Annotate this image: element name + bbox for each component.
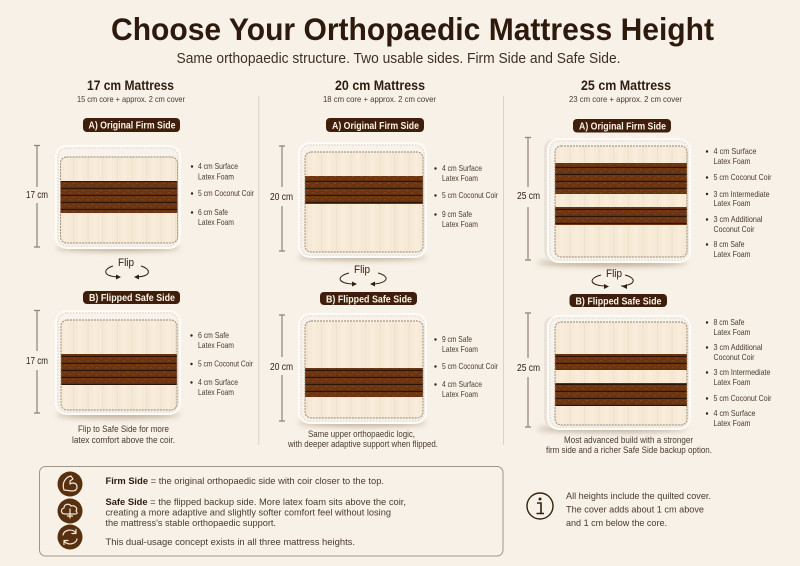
caption: 25 cm (546, 435, 712, 455)
layer list: 25 cm firm: Coconut Coir (714, 224, 755, 234)
label pill: safe side: B) Flipped Safe Side (89, 293, 175, 304)
flip arrows: 20 cm (340, 264, 386, 286)
layer list: 25 cm firm: 5 cm Coconut Coir (714, 172, 772, 182)
text: dual usage: This dual-usage concept exists in all three mattress heights. (106, 536, 355, 547)
layer list: 17 cm safe: 4 cm Surface (198, 377, 238, 387)
note: cover (566, 490, 711, 528)
note: cover: The cover adds about 1 cm above (566, 504, 704, 514)
panel: 20 cm mattress (270, 77, 498, 449)
layer list: 20 cm firm: 4 cm Surface (442, 163, 482, 173)
heading: 20 cm: 20 cm Mattress (335, 77, 425, 93)
flip arrows: 25 cm: Flip (606, 268, 622, 280)
height bracket: 20 cm firm: 20 cm (270, 192, 293, 203)
layer list: 25 cm firm: 3 cm Additional (714, 214, 763, 224)
layer list: 20 cm safe: 9 cm Safe (442, 334, 472, 344)
layer list: 25 cm safe: 3 cm Intermediate (714, 367, 771, 377)
layer list: 25 cm safe: 8 cm Safe (714, 317, 745, 327)
layer list: 25 cm firm: Latex Foam (714, 198, 751, 208)
panel: 25 cm mattress (517, 77, 772, 455)
layer list: 17 cm safe (190, 330, 253, 397)
mattress: 20 cm safe side (298, 314, 426, 426)
layer list: 20 cm firm (434, 163, 498, 229)
mattress: 17 cm safe side (56, 311, 180, 418)
layer list: 25 cm safe: Coconut Coir (714, 352, 755, 362)
layer list: 25 cm firm: 8 cm Safe (714, 239, 745, 249)
height bracket: 20 cm safe: 20 cm (270, 362, 293, 373)
layer list: 20 cm safe: 4 cm Surface (442, 379, 482, 389)
mattress: 25 cm firm side (537, 139, 690, 266)
caption: 20 cm (287, 429, 438, 449)
subheading: 20 cm: 18 cm core + approx. 2 cm cover (323, 94, 436, 104)
text: safe side: the mattress's stable orthopaedic support. (106, 517, 276, 528)
caption: 17 cm: latex comfort above the coir. (72, 435, 175, 445)
layer list: 17 cm firm: Latex Foam (198, 217, 234, 227)
caption: 20 cm: Same upper orthopaedic logic, (308, 429, 415, 439)
panel: 17 cm mattress (26, 77, 254, 445)
layer list: 17 cm safe: Latex Foam (198, 387, 234, 397)
layer list: 20 cm safe: 5 cm Coconut Coir (442, 361, 498, 371)
layer list: 25 cm safe: 4 cm Surface (714, 408, 756, 418)
height bracket: 17 cm firm (26, 146, 48, 247)
layer list: 20 cm firm: Latex Foam (442, 219, 478, 229)
layer list: 17 cm firm (191, 161, 254, 227)
layer list: 25 cm safe: Latex Foam (714, 377, 751, 387)
layer list: 20 cm firm: 5 cm Coconut Coir (442, 190, 498, 200)
layer list: 17 cm firm: 5 cm Coconut Coir (198, 188, 254, 198)
caption: 17 cm: Flip to Safe Side for more (78, 424, 169, 434)
height bracket: 17 cm firm: 17 cm (26, 190, 48, 201)
caption: 25 cm: Most advanced build with a stronger (564, 435, 693, 445)
label pill: firm side (326, 118, 424, 132)
layer list: 25 cm firm: 3 cm Intermediate (714, 189, 770, 199)
note: cover: All heights include the quilted cover. (566, 490, 711, 501)
text: safe side (106, 496, 406, 528)
height bracket: 20 cm safe (270, 315, 293, 421)
layer list: 25 cm safe: 3 cm Additional (714, 342, 763, 352)
height bracket: 20 cm firm (270, 146, 293, 251)
caption: 25 cm: firm side and a richer Safe Side backup option. (546, 445, 712, 455)
icon: info (527, 493, 553, 519)
text: safe side: Safe Side = the flipped backup side. More latex foam sits above the coir, (106, 496, 406, 507)
layer list: 20 cm safe: Latex Foam (442, 344, 478, 354)
label pill: firm side (83, 118, 180, 132)
flip arrows: 20 cm: Flip (354, 264, 370, 276)
flip arrows: 17 cm (106, 257, 148, 280)
caption: 20 cm: with deeper adaptive support when flipped. (287, 439, 438, 449)
subheading: 25 cm: 23 cm core + approx. 2 cm cover (569, 94, 682, 104)
icon: rotate arrows (58, 524, 82, 550)
label pill: firm side: A) Original Firm Side (579, 122, 666, 132)
height bracket: 25 cm firm: 25 cm (517, 191, 540, 202)
caption: 17 cm (72, 424, 175, 445)
layer list: 20 cm safe: Latex Foam (442, 389, 478, 399)
label pill: firm side: A) Original Firm Side (88, 121, 176, 132)
label pill: firm side (573, 119, 671, 132)
subtitle: Same orthopaedic structure. Two usable sides. Firm Side and Safe Side. (176, 51, 620, 67)
layer list: 20 cm safe (434, 334, 498, 399)
layer list: 20 cm firm: 9 cm Safe (442, 209, 472, 219)
layer list: 17 cm safe: Latex Foam (198, 340, 234, 350)
icon: flexed arm (58, 472, 82, 496)
text: safe side: creating a more adaptive and slightly softer comfort feel without losing (106, 506, 391, 518)
flip arrows: 25 cm (592, 268, 633, 289)
layer list: 25 cm safe: Latex Foam (714, 327, 751, 337)
mattress: 17 cm firm side (56, 146, 180, 251)
layer list: 25 cm firm: Latex Foam (714, 249, 751, 259)
layer list: 25 cm firm (706, 146, 772, 259)
layer list: 25 cm firm: 4 cm Surface (714, 146, 757, 156)
heading: 17 cm: 17 cm Mattress (87, 77, 174, 93)
divider left (258, 96, 259, 445)
flip arrows: 17 cm: Flip (118, 257, 134, 269)
panel: side explanation (40, 466, 503, 556)
mattress: 25 cm safe side (537, 316, 690, 432)
height bracket: 17 cm safe: 17 cm (26, 356, 48, 367)
divider right (503, 96, 504, 445)
icon: cloud (58, 498, 82, 524)
height bracket: 17 cm safe (26, 310, 48, 413)
height bracket: 25 cm safe: 25 cm (517, 363, 540, 374)
heading: 25 cm: 25 cm Mattress (581, 77, 671, 93)
note: cover: and 1 cm below the core. (566, 517, 667, 528)
label pill: safe side: B) Flipped Safe Side (576, 296, 662, 308)
layer list: 25 cm firm: Latex Foam (714, 156, 751, 166)
title: Choose Your Orthopaedic Mattress Height (111, 11, 714, 47)
text: firm side: Firm Side = the original orthopaedic side with coir closer to the top. (106, 475, 384, 486)
layer list: 17 cm safe: 5 cm Coconut Coir (198, 358, 253, 368)
height bracket: 25 cm firm (517, 138, 540, 260)
layer list: 25 cm safe (706, 317, 772, 428)
layer list: 17 cm safe: 6 cm Safe (198, 330, 229, 340)
layer list: 25 cm safe: 5 cm Coconut Coir (714, 393, 772, 403)
subheading: 17 cm: 15 cm core + approx. 2 cm cover (77, 94, 185, 104)
layer list: 17 cm firm: 4 cm Surface (198, 161, 238, 171)
layer list: 20 cm firm: Latex Foam (442, 173, 478, 183)
layer list: 17 cm firm: 6 cm Safe (198, 207, 228, 217)
layer list: 17 cm firm: Latex Foam (198, 172, 234, 182)
label pill: safe side: B) Flipped Safe Side (326, 294, 412, 306)
mattress: 20 cm firm side (298, 143, 426, 260)
height bracket: 25 cm safe (517, 313, 540, 427)
label pill: firm side: A) Original Firm Side (332, 121, 419, 132)
layer list: 25 cm safe: Latex Foam (714, 418, 751, 428)
